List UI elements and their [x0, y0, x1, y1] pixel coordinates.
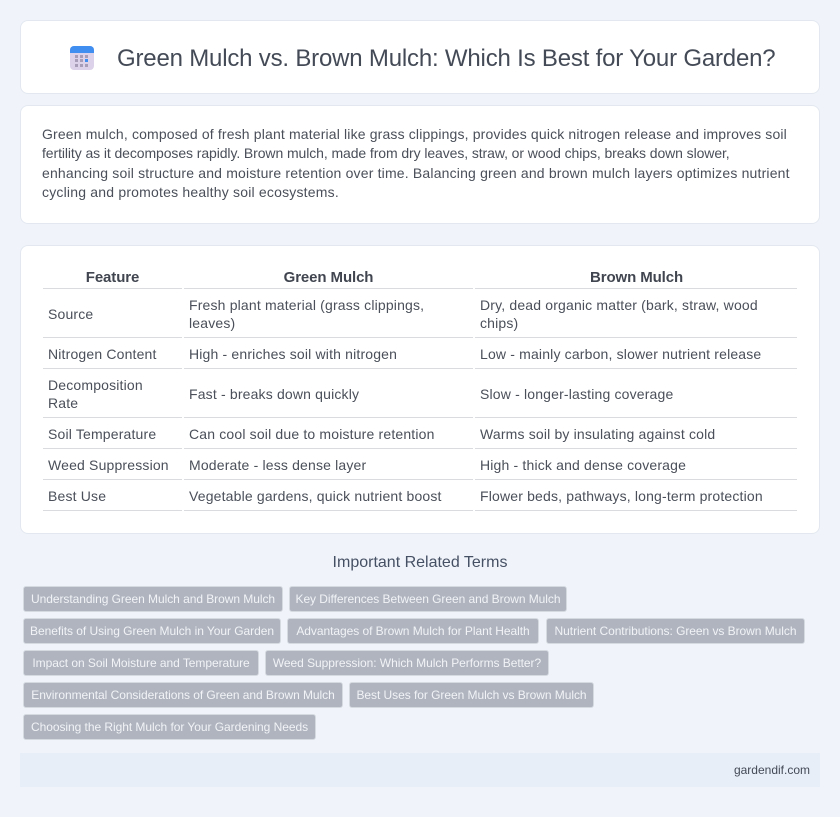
row: source: Fresh plant material (grass clippings,	[189, 297, 424, 313]
panel: comparison table	[20, 245, 820, 534]
tag: Weed Suppression: Which Mulch Performs Better?	[273, 656, 541, 670]
tag: Understanding Green Mulch and Brown Mulch	[31, 592, 275, 606]
tag: Advantages of Brown Mulch for Plant Health	[296, 624, 530, 638]
row: soil temperature	[48, 426, 715, 442]
row: best use: Flower beds, pathways, long-term protection	[480, 488, 763, 504]
tag	[546, 618, 805, 644]
intro paragraph: cycling and promotes healthy soil ecosystems.	[42, 184, 339, 200]
tag: Impact on Soil Moisture and Temperature	[32, 656, 250, 670]
intro paragraph: enhancing soil structure and moisture retention over time. Balancing green and brown mulch layers optimizes nutrient	[42, 165, 790, 181]
footer source text: gardendif.com	[734, 763, 810, 777]
tag	[349, 682, 594, 708]
row: source: Source	[48, 306, 93, 322]
row: weed suppression: Moderate - less dense layer	[189, 457, 366, 473]
row: soil temperature: Soil Temperature	[48, 426, 156, 442]
footer bar	[20, 753, 820, 787]
row: source: leaves)	[189, 315, 235, 331]
row: weed suppression: High - thick and dense coverage	[480, 457, 686, 473]
row: best use: Best Use	[48, 488, 106, 504]
row: weed suppression	[48, 457, 686, 473]
row: weed suppression: Weed Suppression	[48, 457, 169, 473]
tag: Key Differences Between Green and Brown Mulch	[295, 592, 560, 606]
row: decomposition rate: Fast - breaks down quickly	[189, 386, 359, 402]
tag: Benefits of Using Green Mulch in Your Garden	[30, 624, 274, 638]
row: best use: Vegetable gardens, quick nutrient boost	[189, 488, 442, 504]
intro paragraph	[42, 126, 790, 200]
title: Green Mulch vs. Brown Mulch: Which Is Best for Your Garden?	[117, 45, 775, 72]
tag: Environmental Considerations of Green and Brown Mulch	[31, 688, 335, 702]
tag	[287, 618, 539, 644]
row: source	[48, 297, 758, 331]
table header: Green Mulch	[284, 269, 373, 286]
row: decomposition rate: Rate	[48, 395, 78, 411]
table header: Feature	[86, 269, 139, 286]
table header: Brown Mulch	[590, 269, 683, 286]
row: nitrogen content	[48, 346, 761, 362]
row: source: chips)	[480, 315, 518, 331]
table header	[86, 269, 683, 286]
row: nitrogen content: Nitrogen Content	[48, 346, 157, 362]
tag	[23, 714, 316, 740]
tag: Best Uses for Green Mulch vs Brown Mulch	[356, 688, 587, 702]
tag: Choosing the Right Mulch for Your Gardening Needs	[31, 720, 308, 734]
tag	[23, 618, 281, 644]
tag	[23, 650, 259, 676]
tag	[265, 650, 549, 676]
row: nitrogen content: Low - mainly carbon, slower nutrient release	[480, 346, 761, 362]
tag	[289, 586, 567, 612]
row: decomposition rate: Decomposition	[48, 377, 143, 393]
row: decomposition rate: Slow - longer-lasting coverage	[480, 386, 673, 402]
tag	[23, 586, 283, 612]
heading: important related terms: Important Related Terms	[333, 554, 507, 571]
panel: introduction text	[20, 105, 820, 224]
panel: title header	[20, 20, 820, 94]
row: nitrogen content: High - enriches soil with nitrogen	[189, 346, 397, 362]
intro paragraph: Green mulch, composed of fresh plant material like grass clippings, provides quick nitrogen release and improves soil	[42, 126, 787, 142]
row: best use	[48, 488, 763, 504]
related term tags	[23, 586, 805, 740]
row: decomposition rate	[48, 377, 673, 411]
tag	[23, 682, 343, 708]
intro paragraph: fertility as it decomposes rapidly. Brown mulch, made from dry leaves, straw, or wood chips, breaks down slower,	[42, 145, 730, 161]
tag: Nutrient Contributions: Green vs Brown Mulch	[555, 624, 796, 638]
row: soil temperature: Warms soil by insulating against cold	[480, 426, 715, 442]
row: soil temperature: Can cool soil due to moisture retention	[189, 426, 435, 442]
icon: calendar	[70, 46, 94, 70]
comparison table	[43, 269, 797, 511]
row: source: Dry, dead organic matter (bark, straw, wood	[480, 297, 758, 313]
